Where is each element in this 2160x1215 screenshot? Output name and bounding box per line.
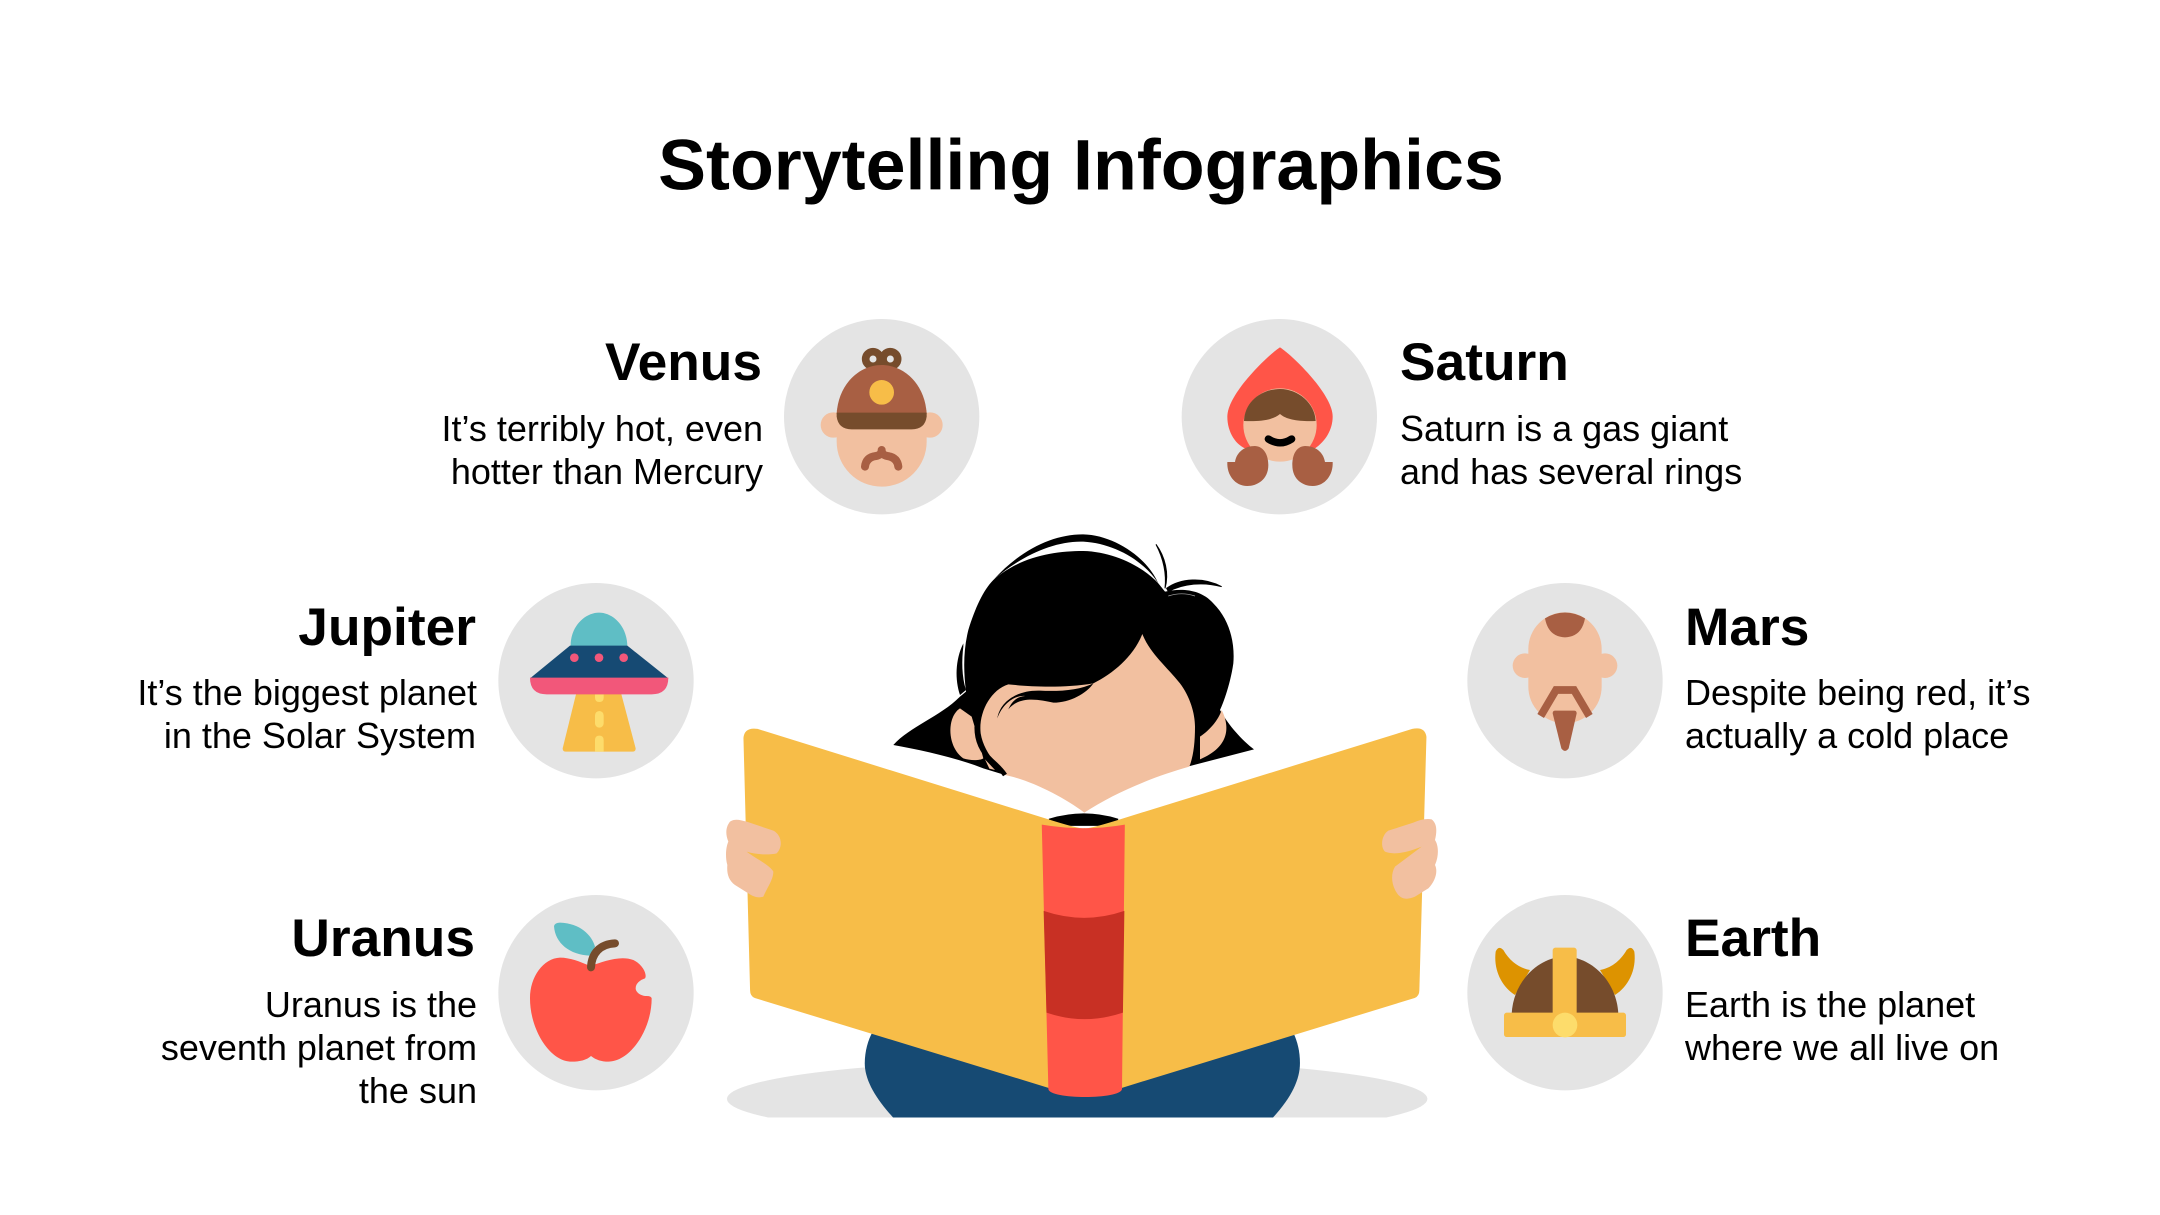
item: Venus bbox=[442, 319, 979, 514]
item: Uranus bbox=[161, 895, 694, 1111]
icon: UFO bbox=[498, 583, 694, 778]
icon: miner with moustache bbox=[784, 319, 979, 514]
title: Storytelling Infographics bbox=[658, 126, 1504, 206]
icon: bald man with goatee bbox=[1467, 583, 1663, 778]
spine top bbox=[1049, 813, 1118, 826]
description: Earth is the planet bbox=[1685, 984, 1975, 1025]
jaw line bbox=[977, 720, 1005, 775]
book and body bbox=[727, 728, 1427, 1138]
forehead hair strands bbox=[997, 683, 1093, 718]
ears bbox=[950, 708, 983, 760]
description: where we all live on bbox=[1684, 1027, 1999, 1068]
description: Uranus is the bbox=[265, 984, 477, 1025]
head with hair and face bbox=[893, 534, 1254, 813]
description: It’s the biggest planet bbox=[137, 672, 477, 713]
description: seventh planet from bbox=[161, 1027, 477, 1068]
description: Despite being red, it’s bbox=[1685, 672, 2031, 713]
book cover: right bbox=[1084, 728, 1426, 1091]
item: Saturn bbox=[1182, 319, 1742, 514]
legs bbox=[865, 1032, 1300, 1117]
heading: Earth bbox=[1685, 909, 1821, 968]
spine band bbox=[1044, 911, 1124, 1019]
floor shadow bbox=[727, 1068, 1428, 1118]
description: It’s terribly hot, even bbox=[442, 408, 763, 449]
description: Saturn is a gas giant bbox=[1400, 408, 1728, 449]
description: the sun bbox=[359, 1070, 477, 1111]
description: and has several rings bbox=[1400, 451, 1742, 492]
book cover: left bbox=[743, 729, 1084, 1091]
book spine bbox=[1042, 825, 1125, 1097]
item: Mars bbox=[1467, 583, 2031, 778]
heading: Venus bbox=[605, 333, 762, 392]
heading: Uranus bbox=[291, 909, 475, 968]
heading: Mars bbox=[1685, 598, 1809, 657]
description: hotter than Mercury bbox=[451, 451, 763, 492]
hand: left bbox=[726, 820, 781, 897]
item: Jupiter bbox=[137, 583, 694, 778]
icon: apple bbox=[498, 895, 694, 1090]
icon: viking helmet bbox=[1467, 895, 1663, 1090]
heading: Saturn bbox=[1400, 333, 1569, 392]
central figure: person reading a book bbox=[726, 534, 1438, 1138]
description: actually a cold place bbox=[1685, 715, 2009, 756]
face bbox=[980, 634, 1195, 813]
heading: Jupiter bbox=[298, 598, 476, 657]
hand: right bbox=[1382, 819, 1438, 899]
icon: girl in red hood bbox=[1182, 319, 1377, 514]
item: Earth bbox=[1467, 895, 1999, 1090]
description: in the Solar System bbox=[164, 715, 476, 756]
